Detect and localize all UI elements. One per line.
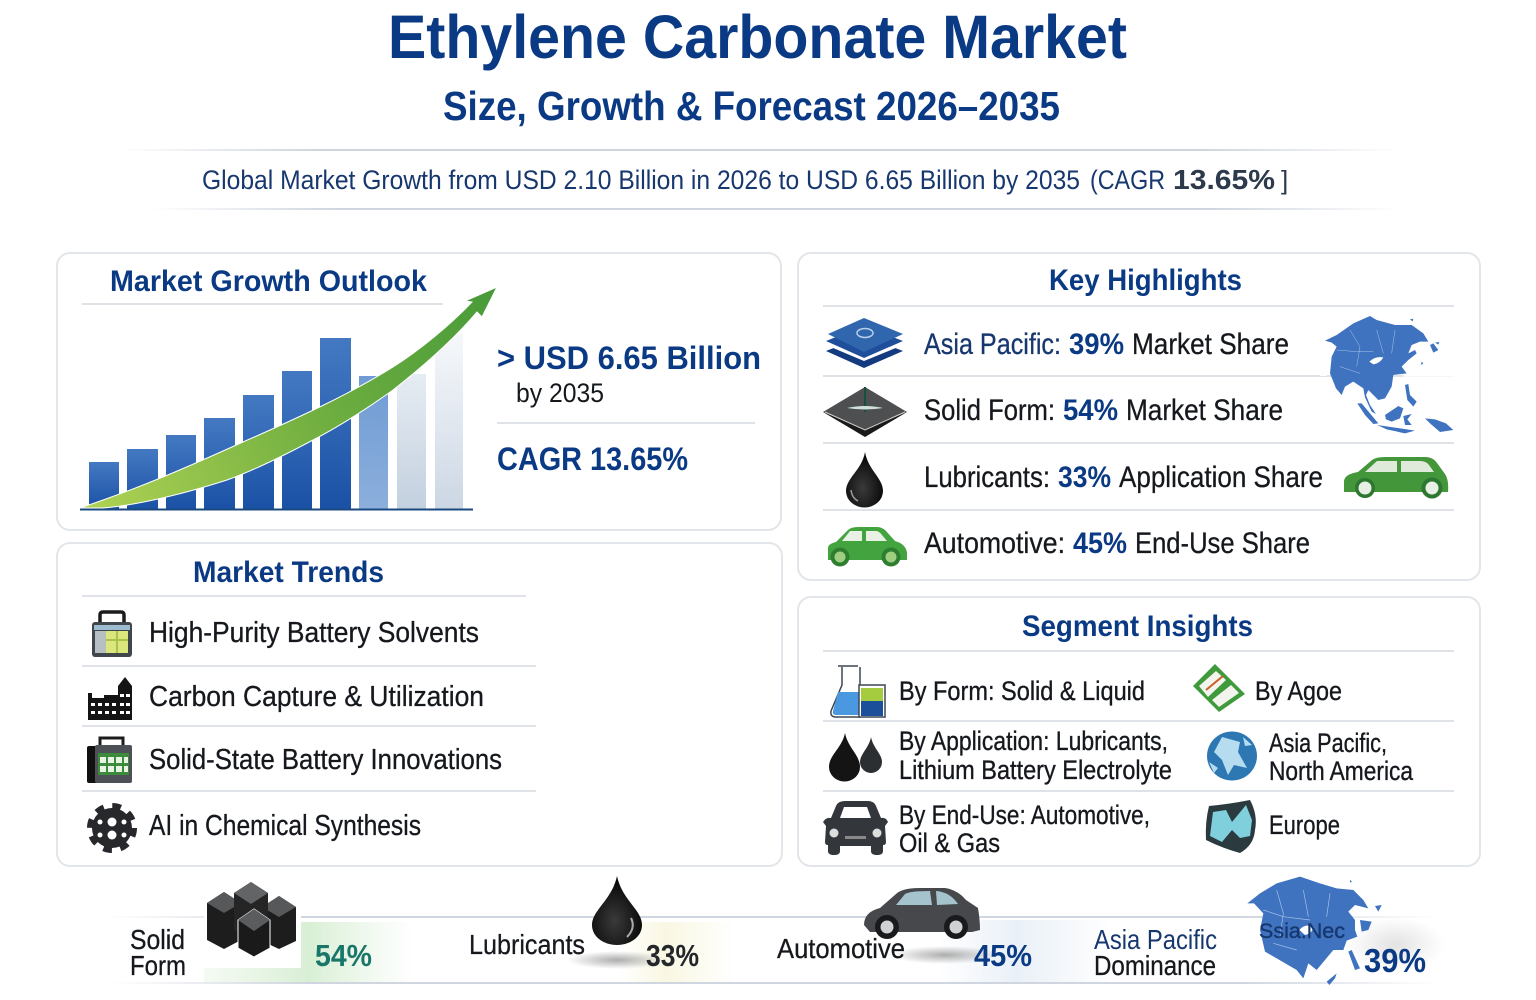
heading: market growth outlook: Market Growth Outlook (110, 265, 427, 298)
text: by application: Lithium Battery Electrolyte (899, 755, 1172, 785)
growth summary strip: 13.65% (1173, 164, 1275, 195)
icon: solid form diamond (823, 387, 907, 437)
stat: asia pacific dominance 39%: Asia Pacific (1094, 924, 1217, 955)
text: highlight 3: Application Share (1119, 461, 1323, 494)
text: highlight 3: Lubricants: (924, 461, 1050, 494)
panel: market growth outlook (57, 253, 781, 530)
panel: segment insights (798, 597, 1480, 866)
stat: lubricants 33%: 33% (646, 938, 699, 973)
icon: two oil drops (829, 733, 882, 781)
text: highlight 2: 54% (1063, 394, 1118, 427)
icon: dark car (864, 888, 980, 939)
growth arrow (80, 287, 497, 508)
stat: asia pacific dominance 39% (1094, 877, 1445, 985)
growth summary strip (120, 149, 1400, 210)
text: by form: By Form: Solid & Liquid (899, 676, 1145, 706)
icon: green car (828, 527, 907, 566)
stat: solid form 54%: 54% (315, 938, 372, 973)
text: regions 1: Asia Pacific, (1269, 728, 1387, 758)
stat: lubricants 33% (469, 876, 735, 982)
text: highlight 3: 33% (1058, 461, 1111, 494)
text: by application (899, 726, 1172, 785)
icon: oil drop (846, 452, 883, 508)
text: highlight 2: Solid Form: (924, 394, 1055, 427)
text: highlight 4: 45% (1073, 527, 1127, 560)
text: regions 1 (1269, 728, 1414, 786)
panel: key highlights (798, 253, 1480, 580)
icon: asia pacific map (1320, 316, 1460, 433)
growth summary strip: ] (1281, 165, 1288, 195)
icon: carbon capture factory (88, 677, 132, 720)
stat: solid form 54%: Form (130, 950, 186, 981)
text: highlight 1: 39% (1069, 328, 1124, 361)
icon: globe (1207, 732, 1257, 780)
stat: automotive 45% (777, 888, 1110, 982)
icon: gear (90, 806, 134, 850)
icon: asia map (1247, 877, 1382, 985)
heading: key highlights: Key Highlights (1049, 264, 1242, 297)
stat: solid form 54%: Solid (130, 924, 185, 955)
text: trend 2: Carbon Capture & Utilization (149, 681, 484, 713)
icon: battery solvents (92, 612, 132, 657)
text: highlight 3 (924, 461, 1323, 494)
bar chart (80, 333, 473, 510)
bottom stats band (105, 870, 1445, 985)
icon: europe map chip (1206, 800, 1256, 853)
text: highlight 1: Asia Pacific: (924, 328, 1061, 361)
growth summary strip: (CAGR (1090, 165, 1165, 195)
icon: solid blocks (207, 882, 296, 957)
text: trend 3: Solid-State Battery Innovations (149, 744, 502, 776)
growth summary strip: Global Market Growth from USD 2.10 Billion in 2026 to USD 6.65 Billion by 2035 (202, 165, 1080, 195)
title: Ethylene Carbonate Market (388, 3, 1127, 71)
text: highlight 4: Automotive: (924, 527, 1065, 560)
stat: asia pacific dominance 39%: Ssia.Nec (1259, 920, 1345, 943)
text: highlight 1: Market Share (1132, 328, 1289, 361)
text: regions 1: North America (1269, 756, 1414, 786)
text: highlight 2 (924, 394, 1283, 427)
text: by application: By Application: Lubricants, (899, 726, 1168, 756)
stat: asia pacific dominance 39%: 39% (1364, 942, 1426, 979)
icon: flask and beaker (831, 666, 885, 717)
text: highlight 2: Market Share (1126, 394, 1283, 427)
icon: solid-state battery (87, 738, 132, 783)
stat: market size (497, 340, 761, 408)
text: by age: By Agoe (1255, 676, 1342, 706)
text: highlight 4 (924, 527, 1310, 560)
stat: cagr: CAGR 13.65% (497, 441, 688, 477)
stat: automotive 45%: 45% (974, 938, 1032, 973)
stat: solid form 54% (130, 870, 414, 982)
icon: green book (1193, 664, 1245, 712)
icon: large oil drop (592, 876, 642, 945)
heading: market trends: Market Trends (193, 556, 384, 589)
icon: asia pacific layers (826, 318, 903, 368)
stat: automotive 45%: Automotive (777, 933, 905, 964)
text: highlight 1 (924, 328, 1289, 361)
text: by end-use: By End-Use: Automotive, (899, 800, 1150, 830)
stat: market size: > USD 6.65 Billion (497, 340, 761, 376)
stat: asia pacific dominance 39%: Dominance (1094, 950, 1216, 981)
text: by end-use: Oil & Gas (899, 828, 1000, 858)
subtitle: Size, Growth & Forecast 2026–2035 (443, 83, 1060, 129)
text: trend 1: High-Purity Battery Solvents (149, 617, 479, 649)
icon: green car right (1344, 457, 1448, 498)
text: regions 2: Europe (1269, 810, 1340, 840)
icon: car front (823, 801, 888, 855)
heading: segment insights: Segment Insights (1022, 610, 1253, 643)
text: highlight 4: End-Use Share (1135, 527, 1310, 560)
text: trend 4: AI in Chemical Synthesis (149, 810, 421, 842)
stat: lubricants 33%: Lubricants (469, 929, 585, 960)
text: by end-use (899, 800, 1150, 858)
stat: market size: by 2035 (516, 378, 604, 408)
panel: market trends (57, 543, 782, 866)
